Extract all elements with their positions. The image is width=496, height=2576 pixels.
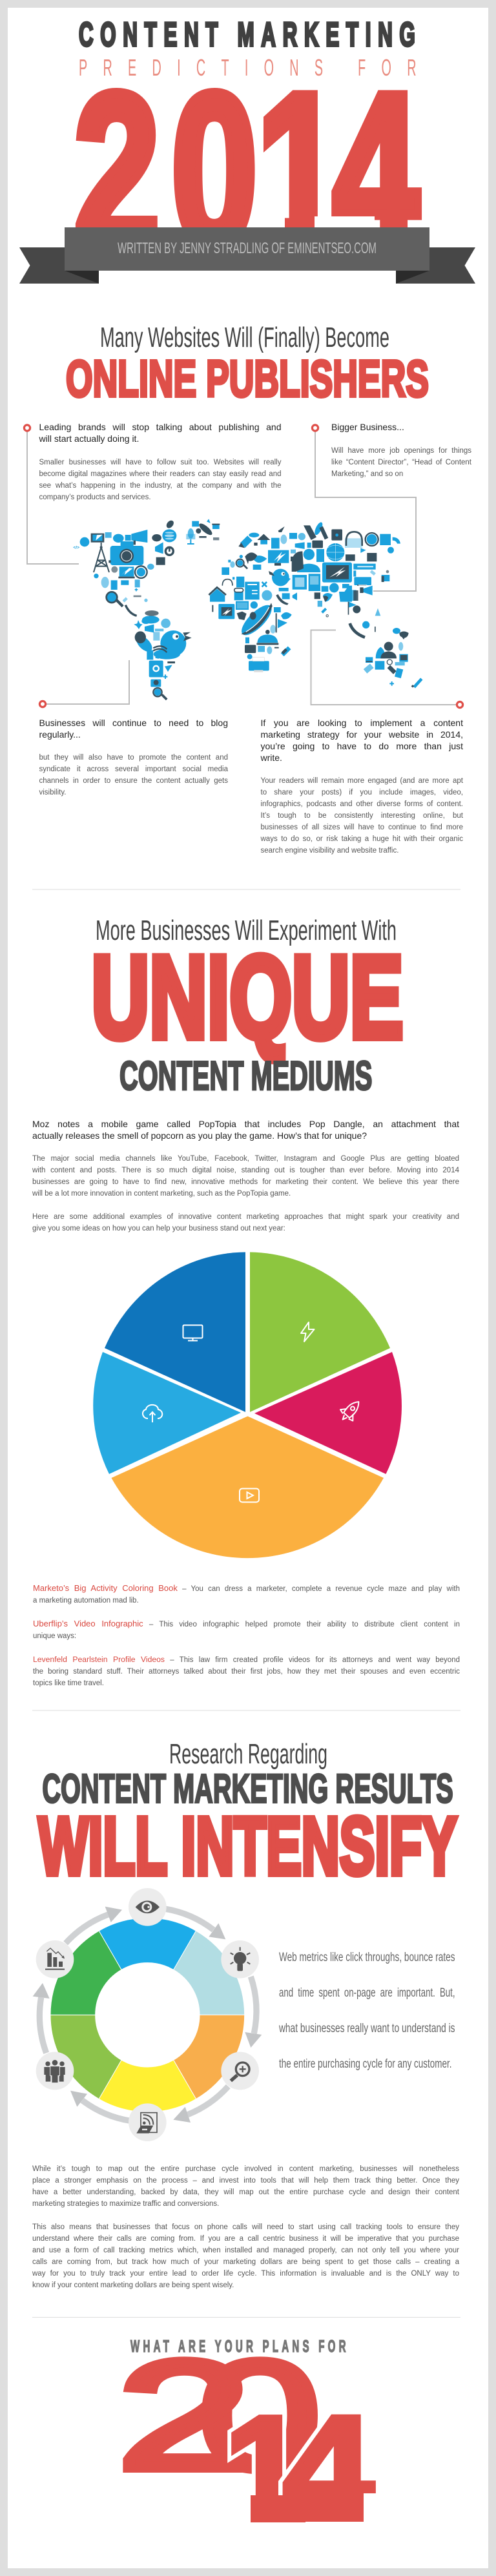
- text block: purchase cycle: way for you to truly track your entire lead to order life cycle. This information is invaluable and is the ONLY way to: [32, 2270, 459, 2278]
- pie chart: [93, 1252, 402, 1558]
- text block: leading brands: Smaller businesses will have to follow suit too. Websites will really: [39, 459, 282, 466]
- subtitle: predictions for: PREDICTIONS FOR: [79, 56, 417, 81]
- pie slice: magenta: [254, 1352, 402, 1474]
- text block: purchase cycle: [32, 2165, 459, 2289]
- heading: will intensify: WILL INTENSIFY: [38, 1801, 457, 1892]
- text block: content examples: Marketo’s Big Activity Coloring Book – You can dress a marketer, complete a revenue cycle maze and play with: [33, 1583, 460, 1593]
- text block: leading brands: will start actually doing it.: [39, 433, 139, 444]
- icon: monitor: [183, 1325, 203, 1341]
- icon: rss tablet: [136, 2113, 157, 2134]
- text block: continue to blog: channels in order to ensure the content actually gets: [39, 777, 228, 785]
- text block: moz poptopia: with content and posts. There is so much digital noise, standing out is tougher than ever before. Moving into 2014: [32, 1167, 459, 1174]
- icon: cloud upload: [143, 1405, 162, 1422]
- heading: content mediums: CONTENT MEDIUMS: [119, 1054, 372, 1099]
- text block: implement a strategy: to share your posts) if you include images, video,: [261, 789, 463, 796]
- text block: content examples: topics like time travel.: [33, 1679, 104, 1687]
- text block: purchase cycle: place a stronger emphasis on the process – and invest into tools that will help them track thing better. Once they: [32, 2177, 459, 2185]
- icon: magnifier: [231, 2062, 249, 2081]
- heading: what are your plans for: WHAT ARE YOUR PLANS FOR: [130, 2337, 346, 2356]
- text block: implement a strategy: you’re going to have to do more than just: [261, 741, 463, 751]
- cycle arrows: [33, 1907, 262, 2123]
- text block: bigger business: like “Content Director”, “Head of Content: [331, 459, 471, 466]
- text block: implement a strategy: ways to do so, or risk taking a huge hit with their organic: [261, 835, 463, 843]
- icon: rocket: [336, 1396, 365, 1425]
- connector lines and markers: [24, 425, 463, 708]
- text block: continue to blog: visibility.: [39, 789, 66, 796]
- closing stacked year 2014: 1: [225, 2387, 306, 2551]
- closing stacked year 2014: 1: [225, 2387, 306, 2551]
- icon: light bulb: [231, 1947, 250, 1971]
- text block: implement a strategy: businesses of all sizes will have to continue to find more: [261, 824, 463, 831]
- text block: implement a strategy: [261, 718, 463, 855]
- closing stacked year 2014: 2: [117, 2328, 251, 2502]
- text block: leading brands: [39, 422, 282, 501]
- icon circles: [36, 1888, 259, 2141]
- text block: leading brands: Leading brands will stop talking about publishing and: [39, 422, 282, 432]
- text block: bigger business: Marketing,” and so on: [331, 470, 403, 478]
- text block: purchase cycle: know if your content marketing dollars are being spent wisely.: [32, 2281, 234, 2289]
- pie slice: green: [250, 1252, 390, 1412]
- world map of icons: americas: [73, 519, 220, 700]
- closing stacked year 2014: 4: [283, 2385, 374, 2551]
- text block: content examples: Uberflip’s Video Infographic – This video infographic helped promote their ability to distribute client content in: [33, 1619, 460, 1628]
- divider: [32, 2317, 460, 2318]
- text block: bigger business: [331, 422, 471, 478]
- world map of icons: americas: </>: [73, 545, 79, 550]
- icon: bar chart: [45, 1948, 65, 1970]
- text block: continue to blog: syndicate it across several important social media: [39, 765, 228, 773]
- closing stacked year 2014: 0: [198, 2329, 321, 2502]
- text block: continue to blog: regularly...: [39, 729, 81, 740]
- text block: moz poptopia: Moz notes a mobile game called PopTopia that includes Pop Dangle, an attachment that: [32, 1119, 459, 1129]
- icon: play button: [240, 1488, 259, 1502]
- large year 2014: 2014: [74, 49, 420, 293]
- text block: implement a strategy: It’s tough to be consistently interesting online, but: [261, 812, 463, 820]
- divider: [32, 889, 460, 890]
- text block: moz poptopia: will be a lot more innovation in content marketing, such as the PopTopia game.: [32, 1190, 291, 1198]
- heading: content marketing results: CONTENT MARKETING RESULTS: [42, 1766, 453, 1812]
- title: content marketing: CONTENT MARKETING: [79, 16, 415, 54]
- heading: research regarding: Research Regarding: [169, 1739, 327, 1770]
- text block: leading brands: become digital magazines where their readers can stay easily read and: [39, 470, 282, 478]
- text block: purchase cycle: This also means that businesses that focus on phone calls will need to start using call tracking tools to ensure they: [32, 2223, 459, 2231]
- text block: content examples: unique ways:: [33, 1632, 76, 1640]
- text block: moz poptopia: give you some ideas on how you can help your business stand out next year:: [32, 1225, 285, 1232]
- heading: online publishers: ONLINE PUBLISHERS: [66, 350, 429, 408]
- text block: continue to blog: Businesses will continue to need to blog: [39, 718, 228, 728]
- text block: content examples: a marketing automation mad lib.: [33, 1597, 139, 1605]
- text block: bigger business: Bigger Business...: [331, 422, 404, 432]
- text block: leading brands: company’s products and services.: [39, 493, 151, 501]
- text block: implement a strategy: infographics, podcasts and other diverse forms of content.: [261, 800, 463, 808]
- text block: implement a strategy: If you are looking to implement a content: [261, 718, 463, 728]
- pie slice: orange: [111, 1416, 384, 1558]
- text block: moz poptopia: businesses are going to have to find new, innovative methods for marketing their content. We believe this year there: [32, 1178, 459, 1186]
- callout text: web metrics: [278, 1951, 455, 2071]
- text block: bigger business: Will have more job openings for things: [331, 447, 471, 455]
- text block: implement a strategy: Your readers will remain more engaged (and are more apt: [261, 777, 463, 785]
- text block: content examples: [33, 1583, 460, 1687]
- text block: purchase cycle: and use a form of call tracking metrics which, when installed and managed properly, can not only tell you where your: [32, 2247, 459, 2254]
- text block: moz poptopia: [32, 1119, 459, 1232]
- divider: [32, 1710, 460, 1711]
- ribbon banner: [19, 227, 475, 284]
- text block: continue to blog: [39, 718, 228, 796]
- text block: content examples: the boring standard stuff. Their attorneys talked about their first jobs, how they met their spouses and even eccentric: [33, 1668, 460, 1676]
- closing stacked year 2014: [117, 2328, 383, 2551]
- text block: purchase cycle: have a better understanding, backed by data, they will map out the entire purchase cycle and design their content: [32, 2188, 459, 2196]
- text block: purchase cycle: understand where their calls are coming from. If you are a call centric business it will be imperative that you purchase: [32, 2235, 459, 2243]
- icon: lightning bolt: [301, 1322, 314, 1342]
- icon: people: [44, 2060, 65, 2083]
- text block: purchase cycle: While it’s tough to map out the entire purchase cycle involved in content marketing, businesses will nonetheless: [32, 2165, 459, 2173]
- closing stacked year 2014: 4: [283, 2385, 374, 2551]
- heading: unique: UNIQUE: [92, 932, 403, 1062]
- text block: implement a strategy: write.: [261, 753, 282, 763]
- donut segments: [50, 1918, 245, 2112]
- icon: eye: [136, 1900, 160, 1913]
- text block: implement a strategy: marketing strategy for your website in 2014,: [261, 729, 463, 740]
- text block: implement a strategy: search engine visibility and website traffic.: [261, 847, 398, 855]
- text block: continue to blog: but they will also have to promote the content and: [39, 754, 228, 762]
- text block: content examples: Levenfeld Pearlstein Profile Videos – This law firm created profile videos for its attorneys and went way beyond: [33, 1655, 460, 1664]
- donut cycle diagram: [33, 1888, 262, 2141]
- text block: moz poptopia: actually releases the smell of popcorn as you play the game. How’s that for unique?: [32, 1130, 367, 1141]
- pie slice: sky blue: [93, 1352, 241, 1474]
- pie slice: dark blue: [105, 1252, 245, 1412]
- text block: leading brands: see what’s happening in the industry, at the company and with the: [39, 482, 282, 490]
- text block: purchase cycle: calls are coming from, but track how much of your marketing dollars are being spent to get those calls – creating a: [32, 2258, 459, 2266]
- text block: purchase cycle: marketing strategies to maximize traffic and conversions.: [32, 2200, 219, 2208]
- world map of icons: europe, africa, asia, australia: [209, 521, 423, 688]
- text block: moz poptopia: Here are some additional examples of innovative content marketing approaches that might spark your creativity and: [32, 1213, 459, 1221]
- text block: moz poptopia: The major social media channels like YouTube, Facebook, Twitter, Instagram and Google Plus are getting bloated: [32, 1155, 459, 1163]
